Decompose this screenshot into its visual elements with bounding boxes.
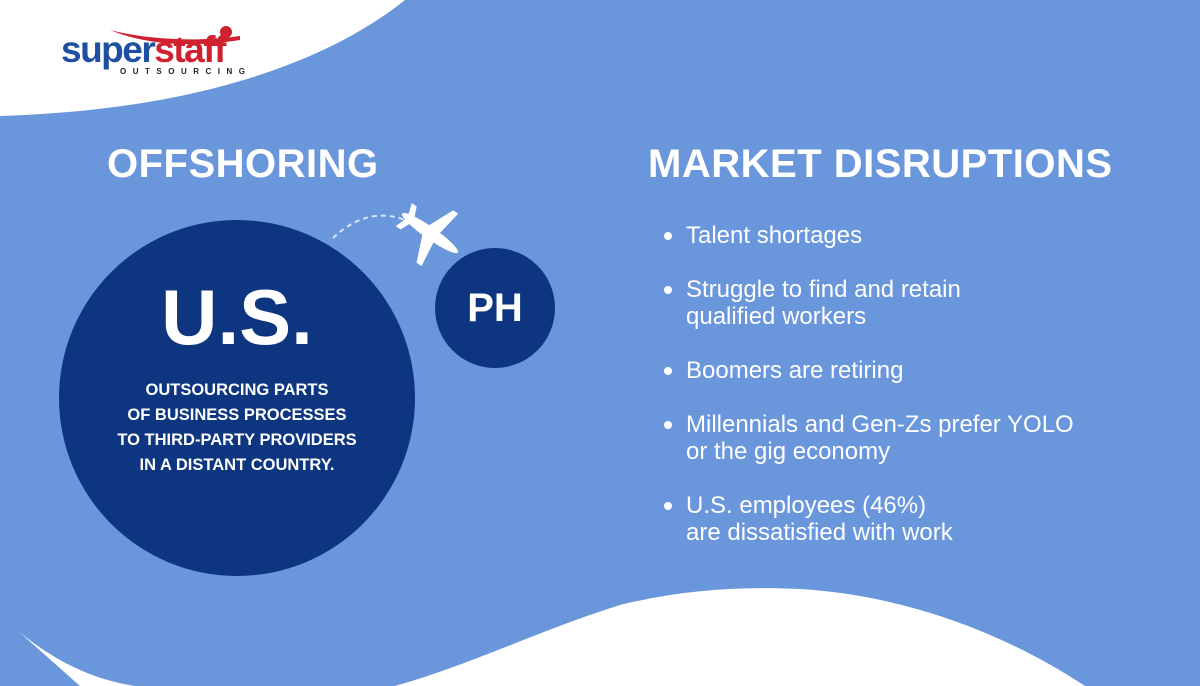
item 4: Millennials and Gen-Zs prefer YOLO	[686, 411, 1074, 438]
title: market disruptions: MARKET DISRUPTIONS	[648, 142, 1113, 186]
item 2: Struggle to find and retain	[686, 276, 961, 303]
definition text: OUTSOURCING PARTS	[145, 381, 329, 399]
item 5: are dissatisfied with work	[686, 519, 953, 546]
item 5	[686, 492, 953, 546]
item 5: U.S. employees (46%)	[686, 492, 926, 519]
item 2: qualified workers	[686, 303, 866, 330]
definition text: TO THIRD-PARTY PROVIDERS	[117, 431, 357, 449]
item 1: Talent shortages	[686, 222, 862, 249]
list: market disruptions	[664, 222, 1074, 546]
U.S. label: U.S.	[161, 273, 313, 361]
definition text: IN A DISTANT COUNTRY.	[140, 456, 334, 474]
icon: plane with dashed path	[332, 203, 458, 266]
circle: PH: PH	[467, 286, 523, 330]
item 2	[686, 276, 961, 330]
logo: superstaff	[61, 29, 225, 70]
logo: OUTSOURCING	[120, 67, 252, 76]
title: offshoring: OFFSHORING	[107, 142, 379, 186]
definition text	[117, 381, 357, 474]
item 4: or the gig economy	[686, 438, 890, 465]
definition text: OF BUSINESS PROCESSES	[127, 406, 347, 424]
circle: PH	[435, 248, 555, 368]
item 3: Boomers are retiring	[686, 357, 903, 384]
circle: U.S.	[59, 220, 415, 576]
item 4	[686, 411, 1074, 465]
